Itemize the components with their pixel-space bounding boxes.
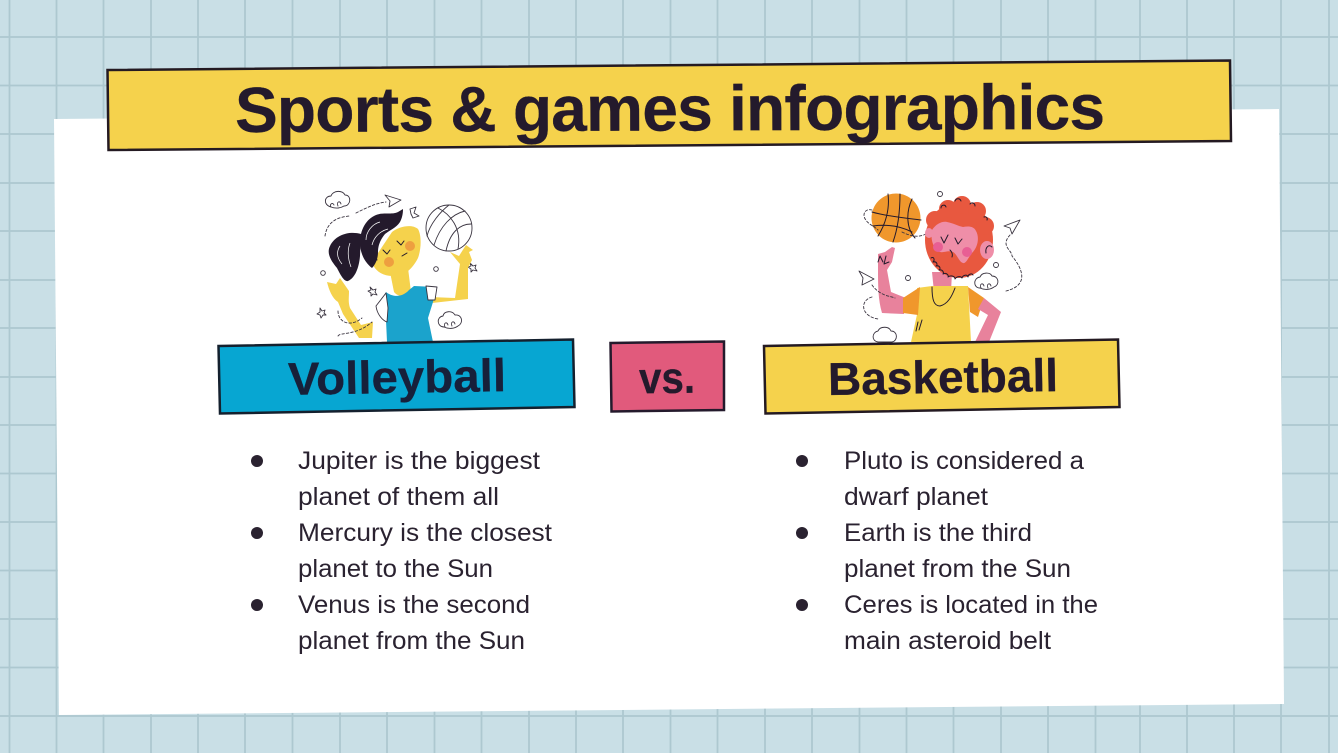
jersey — [911, 286, 971, 342]
ear — [980, 241, 994, 259]
label: Basketball: Basketball — [828, 349, 1058, 405]
list: basketball facts: dwarf planet — [844, 483, 988, 511]
panel: white sheet — [54, 109, 1284, 715]
icon: volleyball — [426, 205, 472, 251]
list: volleyball facts: Venus is the second — [298, 591, 530, 619]
label: Volleyball: Volleyball — [288, 349, 506, 405]
list: volleyball facts — [251, 447, 552, 655]
list: volleyball facts: planet from the Sun — [298, 627, 525, 655]
head and beard — [925, 196, 994, 278]
illustration: basketball player — [859, 192, 1022, 342]
illustration: volleyball player — [317, 191, 477, 342]
icon: cloud — [438, 312, 462, 328]
neck — [932, 272, 952, 296]
list: basketball facts: Ceres is located in the — [844, 591, 1098, 619]
icon: cloud — [325, 191, 350, 208]
hair — [360, 209, 403, 268]
icon: paper plane — [385, 195, 401, 207]
label: vs. — [610, 342, 724, 412]
face — [931, 222, 978, 263]
list: basketball facts: Pluto is considered a — [844, 447, 1084, 475]
list: volleyball facts: Jupiter is the biggest — [298, 447, 540, 475]
ponytail — [329, 233, 361, 281]
list: basketball facts — [796, 447, 1098, 655]
arm raised — [878, 247, 906, 314]
jersey — [378, 286, 436, 342]
list: volleyball facts: planet to the Sun — [298, 555, 493, 583]
arm right — [430, 245, 473, 303]
title: Sports & games infographics — [235, 71, 1105, 146]
label: vs.: vs. — [639, 354, 695, 403]
icons: clouds — [975, 273, 998, 289]
list: volleyball facts: planet of them all — [298, 483, 499, 511]
list: volleyball facts: Mercury is the closest — [298, 519, 552, 547]
icons: paper planes — [1004, 220, 1020, 234]
head — [372, 226, 421, 276]
title banner — [108, 60, 1231, 150]
icon: basketball — [872, 194, 921, 242]
neck — [390, 268, 411, 296]
list: basketball facts: main asteroid belt — [844, 627, 1051, 655]
arm on hip — [975, 298, 1001, 342]
list: basketball facts: planet from the Sun — [844, 555, 1071, 583]
label: Basketball — [764, 340, 1120, 414]
arm left — [327, 278, 373, 338]
label: Volleyball — [218, 340, 574, 414]
list: basketball facts: Earth is the third — [844, 519, 1032, 547]
